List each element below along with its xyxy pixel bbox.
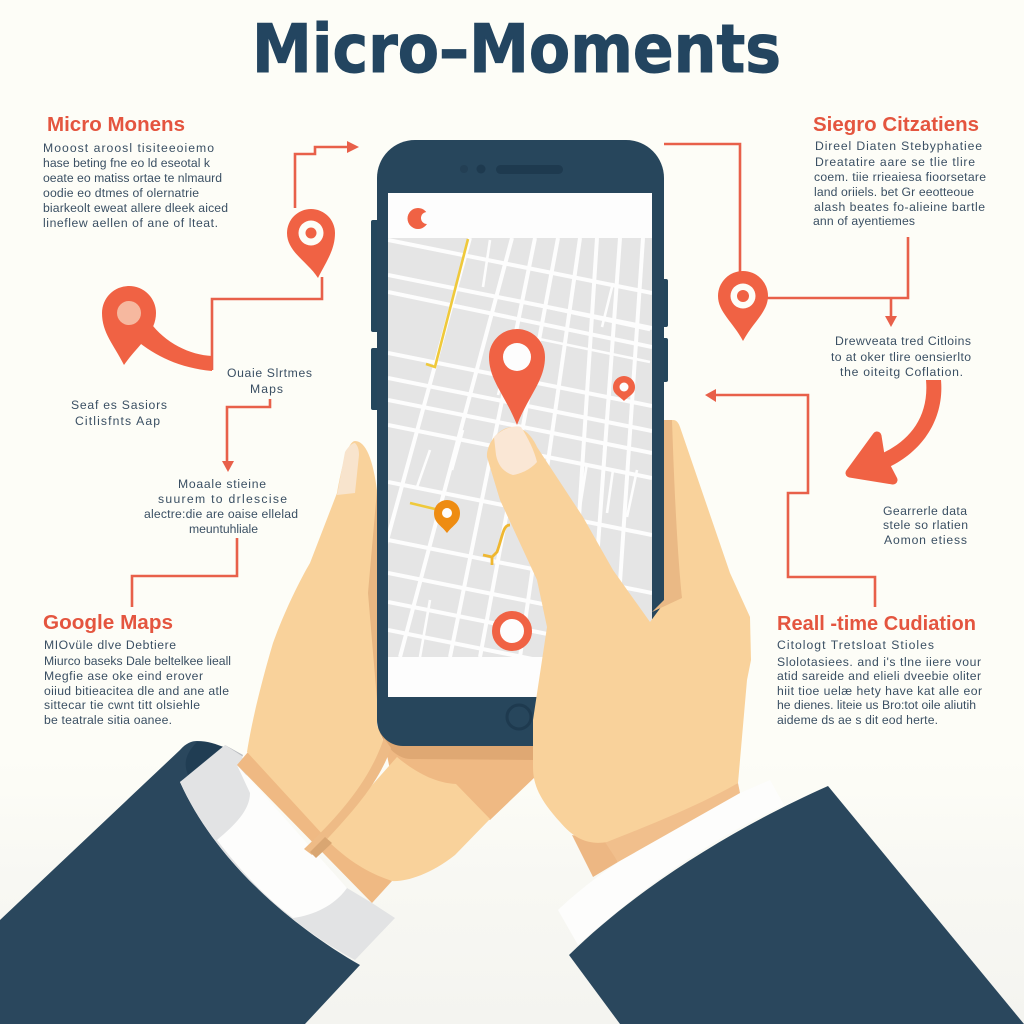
text block: Siegro Citzatiens [813,114,986,228]
connector: real-time heading to phone [714,395,875,607]
connector: Maps label to mobile text [227,399,270,464]
under-phone palm shadow [378,727,535,820]
body text: he dienes. liteie us Bro:tot oile aliutih [777,698,976,712]
screen [388,193,652,697]
icon: top left pin [287,209,335,278]
yellow route left [410,503,435,509]
body text [43,141,228,230]
body text: ann of ayentiemes [813,214,915,228]
heading: Micro Monens [47,114,185,136]
connector: phone to right pin [664,144,740,272]
small red pin [613,376,635,401]
body text: Miurco baseks Dale beltelkee lieall [44,654,231,668]
right sleeve [569,786,1024,1024]
main red pin [489,329,545,425]
icon: curved right arrow [850,380,941,480]
text block: Reall-time Cudiation [777,613,982,727]
label: Drewveata tred Citloins [831,334,971,379]
arrowhead: left to phone [705,389,716,402]
text block: Google Maps [43,612,231,727]
thumb nail [337,443,359,495]
heading: Google Maps [43,612,173,634]
hand and thumb [247,441,387,837]
wrist band [237,752,392,903]
connector: top left pin to arrow [295,147,348,208]
body text: coem. tiie rrieaiesa fioorsetare [814,170,986,184]
wrist crease [304,738,391,855]
connector lines [132,144,908,607]
body text: lineflew aellen of ane of lteat. [43,216,218,230]
side buttons [371,220,668,410]
icon: right pin [718,271,768,341]
body text [44,638,231,727]
body text: atid sareide and elieli dveebie oliter [777,669,981,683]
left hand [237,441,535,903]
body text: Dreatatire aare se tlie tlire [815,155,975,169]
right shirt cuff [558,780,784,945]
connector: right pin to citations text [767,237,908,298]
crease crossing [310,837,332,858]
arrowheads [222,141,897,472]
phone [355,140,668,746]
body text: sittecar tie cwnt titt olsiehle [44,698,200,712]
finger fold shadow [652,420,682,612]
title: Micro–Moments [252,10,781,88]
strip below phone [377,727,534,760]
yellow route top [426,239,468,367]
label: Moaale stieine: suurem to drlescise [158,492,287,506]
body text: MIOvüle dlve Debtiere [44,638,176,652]
label: Drewveata tred Citloins: Drewveata tred Citloins [835,334,971,348]
phone side shadow on hand [368,490,377,700]
label: Gearrerle data: Gearrerle data [883,504,967,518]
home button [507,705,531,729]
label: Gearrerle data: Aomon etiess [884,533,967,547]
connector: branch to center right text [890,298,892,318]
connector: top left pin to swoosh [212,277,322,370]
body text: hiit tioe uelæ hety have kat alle eor [777,684,982,698]
body text: Citologt Tretsloat Stioles [777,638,934,652]
body text [777,638,982,727]
icon: large left pin with swoosh [102,286,212,371]
body text: land oriiels. bet Gr eeotteoue [814,185,974,199]
body text: oodie eo dtmes of olernatrie [43,186,199,200]
body text: oiiud bitieacitea dle and ane atle [44,684,229,698]
body text: oeate eo matiss ortae te nlmaurd [43,171,222,185]
left shirt cuff [180,745,395,960]
body text: Slolotasiees. and i's tlne iiere vour [777,655,981,669]
label: Moaale stieine [144,477,298,536]
body text: alash beates fo-alieine bartle [814,200,985,214]
label: Ouaie Slrtmes Maps: Ouaie Slrtmes [227,366,312,380]
wrist shadow [572,835,618,877]
hand and index finger [487,420,751,843]
label: Ouaie Slrtmes Maps [227,366,312,396]
wrist band [605,783,740,862]
label: Seaf es Sasiors: Citlisfnts Aap [75,414,160,428]
body text: biarkeolt eweat allere dleek aiced [43,201,228,215]
text block: Micro Monens [43,114,228,230]
label: Gearrerle data: stele so rlatien [883,518,968,532]
earpiece [496,165,563,174]
label: Drewveata tred Citloins: the oiteitg Coflation. [840,365,963,379]
icon: red C logo [408,208,433,229]
body text: Megfie ase oke eind erover [44,669,203,683]
label: Seaf es Sasiors: Seaf es Sasiors [71,398,167,412]
index nail [494,426,537,475]
phone body [377,140,664,746]
body text: Mooost aroosl tisiteeoiemo [43,141,214,155]
label: Moaale stieine: Moaale stieine [178,477,266,491]
map [388,238,652,657]
body text: hase beting fne eo ld eseotal k [43,156,211,170]
connector: mobile text to Google Maps [132,538,237,607]
yellow route bottom [483,525,510,565]
body text: aideme ds ae s dit eod herte. [777,713,938,727]
arrowhead: top left [347,141,359,153]
label: Moaale stieine: alectre:die are oaise ellelad [144,507,298,521]
body text [813,139,986,228]
body text: Direel Diaten Stebyphatiee [815,139,982,153]
label: Gearrerle data [883,504,968,547]
arrowhead: down to center right text [885,316,897,327]
right hand [487,420,751,877]
label: Ouaie Slrtmes Maps: Maps [250,382,283,396]
left sleeve [0,741,360,1024]
red ring marker [496,615,528,647]
body text: be teatrale sitia oanee. [44,713,172,727]
orange pin [434,500,460,533]
label: Seaf es Sasiors [71,398,167,428]
label: Drewveata tred Citloins: to at oker tlire oensierlto [831,350,971,364]
lower palm [325,757,490,881]
camera [476,164,486,174]
heading: Siegro Citzatiens [813,114,979,136]
arrowhead: down to mobile text [222,461,234,472]
heading: Reall -time Cudiation [777,613,976,635]
label: Moaale stieine: meuntuhliale [189,522,258,536]
